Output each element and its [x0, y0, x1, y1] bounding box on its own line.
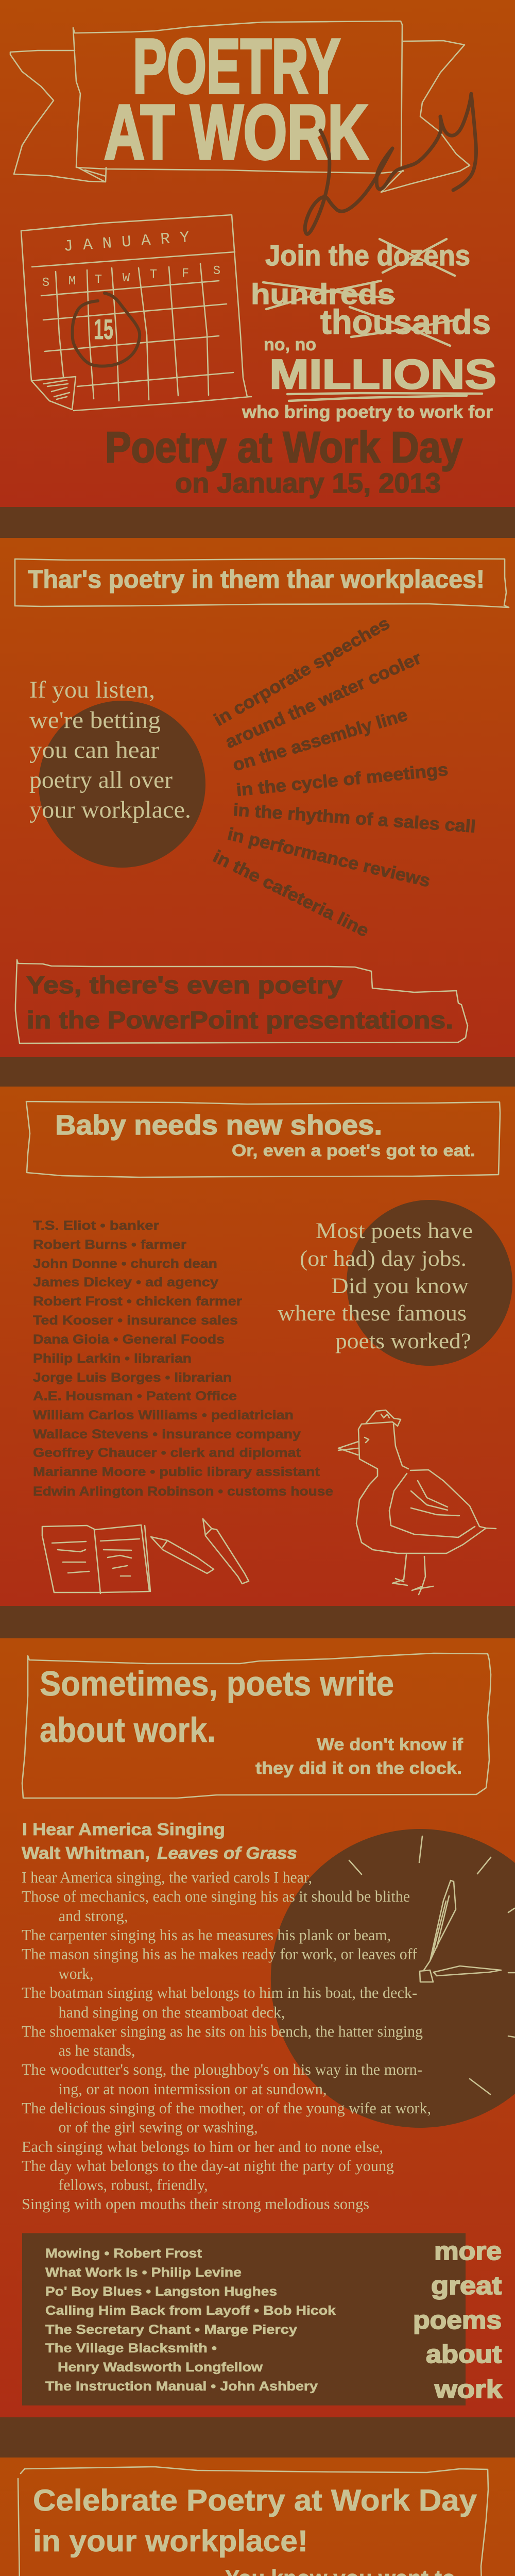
poem text: fellows, robust, friendly, — [59, 2176, 208, 2194]
calendar illustration: S — [42, 276, 49, 290]
poem text: hand singing on the steamboat deck, — [59, 2003, 285, 2021]
poem text: The day what belongs to the day-at night the party of young — [22, 2157, 394, 2175]
list of poets and jobs: Wallace Stevens • insurance company — [33, 1427, 301, 1442]
poem text: Each singing what belongs to him or her and to none else, — [22, 2138, 383, 2156]
title: POETRY — [133, 23, 340, 109]
list of poets and jobs: Ted Kooser • insurance sales — [33, 1313, 238, 1328]
list of poems about work: The Village Blacksmith • — [45, 2341, 217, 2355]
title: AT WORK — [104, 89, 368, 175]
list of poets and jobs: T.S. Eliot • banker — [33, 1218, 159, 1233]
radiating phrases — [210, 614, 476, 941]
list of poets and jobs: Robert Frost • chicken farmer — [33, 1294, 242, 1309]
heading box: about work. — [40, 1710, 216, 1750]
poets question: Most poets have — [316, 1219, 473, 1243]
radiating phrases: in corporate speeches — [211, 614, 393, 730]
list of poems about work: The Instruction Manual • John Ashbery — [45, 2379, 318, 2394]
poem title: Walt Whitman, — [22, 1843, 150, 1862]
panel: celebrate in your workplace — [0, 2458, 515, 2576]
poem text — [22, 1868, 431, 2213]
list of poets and jobs: William Carlos Williams • pediatrician — [33, 1408, 294, 1422]
poets question — [278, 1219, 473, 1353]
panel: hero — [0, 0, 515, 507]
radiating phrases: in the cafeteria line — [210, 846, 372, 941]
poem text: I hear America singing, the varied carols I hear, — [22, 1868, 312, 1886]
list of poets and jobs: John Donne • church dean — [33, 1257, 217, 1271]
event name and date: on January 15, 2013 — [175, 468, 441, 499]
panel: more great poems — [22, 2233, 466, 2405]
callout: join the millions: MILLIONS — [269, 351, 496, 398]
clock face — [271, 1829, 515, 2128]
poem title: Leaves of Grass — [157, 1843, 297, 1862]
poem text: The boatman singing what belongs to him in his boat, the deck- — [22, 1984, 417, 2002]
list of poems about work — [45, 2246, 336, 2394]
calendar illustration: 15 — [94, 313, 113, 345]
calendar illustration: T — [95, 273, 102, 287]
calendar illustration: JANUARY — [63, 229, 190, 256]
heading box: Celebrate Poetry at Work Day — [33, 2484, 477, 2517]
dark circle — [347, 1200, 512, 1366]
list of poets and jobs — [33, 1218, 333, 1499]
list of poems about work: Henry Wadsworth Longfellow — [58, 2360, 263, 2375]
poem text: Singing with open mouths their strong melodious songs — [22, 2195, 369, 2213]
divider band 2 — [0, 1057, 515, 1087]
poem text: The carpenter singing his as he measures his plank or beam, — [22, 1926, 391, 1944]
list of poems about work: Po' Boy Blues • Langston Hughes — [45, 2284, 277, 2299]
workplaces background — [0, 538, 515, 1057]
list of poems about work: Calling Him Back from Layoff • Bob Hicok — [45, 2303, 336, 2318]
callout: join the millions — [242, 239, 496, 422]
poem title: I Hear America Singing — [22, 1820, 225, 1839]
list of poems about work: Mowing • Robert Frost — [45, 2246, 202, 2261]
PowerPoint callout box: in the PowerPoint presentations. — [27, 1006, 453, 1033]
divider band 4 — [0, 2417, 515, 2458]
poem text: Those of mechanics, each one singing his as it should be blithe — [22, 1887, 410, 1905]
poem title — [22, 1820, 297, 1862]
section background — [0, 1638, 515, 2417]
calendar illustration: W — [123, 272, 130, 285]
radiating phrases: around the water cooler — [222, 648, 424, 752]
radiating phrases: on the assembly line — [230, 705, 410, 775]
title — [104, 23, 368, 175]
list of poets and jobs: James Dickey • ad agency — [33, 1275, 218, 1290]
panel: poets write about work — [0, 1638, 515, 2417]
side label: more great poems about work: more — [434, 2238, 502, 2265]
panel: workplaces — [0, 538, 515, 1057]
heading box: they did it on the clock. — [255, 1758, 462, 1777]
calendar illustration — [21, 215, 251, 411]
ribbon banner — [10, 21, 470, 192]
side label: more great poems about work: great — [431, 2272, 502, 2300]
poem text: The woodcutter's song, the ploughboy's on his way in the morn- — [22, 2060, 422, 2078]
intro text: If you listen, — [29, 676, 155, 703]
day jobs background — [0, 1087, 515, 1606]
poem text: ing, or at noon intermission or at sundown, — [59, 2080, 327, 2098]
callout: join the millions: Join the dozens — [265, 239, 470, 272]
list of poets and jobs: Robert Burns • farmer — [33, 1238, 186, 1252]
heading box: Or, even a poet's got to eat. — [232, 1141, 475, 1160]
heading box: Baby needs new shoes. — [55, 1110, 382, 1141]
callout: join the millions: no, no — [264, 335, 316, 354]
callout: join the millions: hundreds — [251, 278, 395, 310]
side label: more great poems about work: poems — [413, 2307, 502, 2334]
calendar illustration: M — [68, 275, 76, 289]
list of poems about work: The Secretary Chant • Marge Piercy — [45, 2323, 297, 2337]
heading box — [15, 558, 509, 607]
section background — [0, 2458, 515, 2576]
heading box: in your workplace! — [33, 2524, 308, 2558]
icon: open book and pencils — [42, 1519, 249, 1594]
list of poems about work: What Work Is • Philip Levine — [45, 2265, 242, 2280]
poets question: Did you know — [331, 1274, 469, 1298]
calendar illustration: S — [213, 264, 220, 278]
poem text: work, — [59, 1964, 94, 1982]
intro text: you can hear — [29, 737, 159, 764]
calendar illustration: T — [150, 268, 157, 282]
list of poets and jobs: Geoffrey Chaucer • clerk and diplomat — [33, 1446, 301, 1460]
heading box — [26, 1101, 500, 1177]
PowerPoint callout box — [15, 960, 468, 1043]
intro text: poetry all over — [29, 767, 173, 793]
heading box — [18, 2467, 488, 2576]
poets question: (or had) day jobs. — [300, 1247, 467, 1271]
list of poets and jobs: Edwin Arlington Robinson • customs house — [33, 1484, 333, 1499]
radiating phrases: in the cycle of meetings — [235, 760, 449, 800]
poem text: The mason singing his as he makes ready for work, or leaves off — [22, 1945, 418, 1963]
radiating phrases: in performance reviews — [226, 824, 432, 891]
list of poets and jobs: Dana Gioia • General Foods — [33, 1332, 225, 1347]
callout: join the millions: thousands — [320, 303, 491, 342]
dark circle — [39, 701, 205, 868]
side label: more great poems about work: about — [426, 2341, 502, 2368]
panel: day jobs — [0, 1087, 515, 1606]
intro text — [29, 676, 191, 823]
callout: join the millions: who bring poetry to work for — [242, 402, 493, 422]
script word: day — [305, 94, 476, 234]
hero background — [0, 0, 515, 507]
side label: more great poems about work — [413, 2238, 503, 2403]
icon: duck — [338, 1410, 496, 1595]
PowerPoint callout box: Yes, there's even poetry — [26, 971, 342, 998]
poem text: or of the girl sewing or washing, — [59, 2118, 258, 2136]
list of poets and jobs: Jorge Luis Borges • librarian — [33, 1370, 232, 1385]
event name and date: Poetry at Work Day — [105, 423, 462, 471]
intro text: we're betting — [29, 707, 161, 734]
poets question: where these famous — [278, 1301, 467, 1326]
poem text: The shoemaker singing as he sits on his bench, the hatter singing — [22, 2022, 423, 2040]
poets question: poets worked? — [335, 1329, 471, 1353]
event name and date — [105, 423, 462, 499]
divider band 1 — [0, 507, 515, 538]
heading box: Thar's poetry in them thar workplaces! — [28, 566, 485, 594]
intro text: your workplace. — [29, 796, 191, 823]
poem text: and strong, — [59, 1907, 128, 1925]
heading box — [22, 1653, 491, 1798]
poem text: as he stands, — [59, 2041, 135, 2059]
list of poets and jobs: A.E. Housman • Patent Office — [33, 1389, 237, 1403]
list of poets and jobs: Marianne Moore • public library assistant — [33, 1465, 320, 1479]
radiating phrases: in the rhythm of a sales call — [232, 800, 476, 837]
side label: more great poems about work: work — [434, 2376, 503, 2403]
calendar illustration: F — [182, 267, 189, 281]
list of poets and jobs: Philip Larkin • librarian — [33, 1351, 192, 1366]
heading box: We don't know if — [317, 1735, 464, 1754]
heading box: Sometimes, poets write — [40, 1664, 394, 1703]
poem text: The delicious singing of the mother, or of the young wife at work, — [22, 2099, 431, 2117]
divider band 3 — [0, 1606, 515, 1638]
